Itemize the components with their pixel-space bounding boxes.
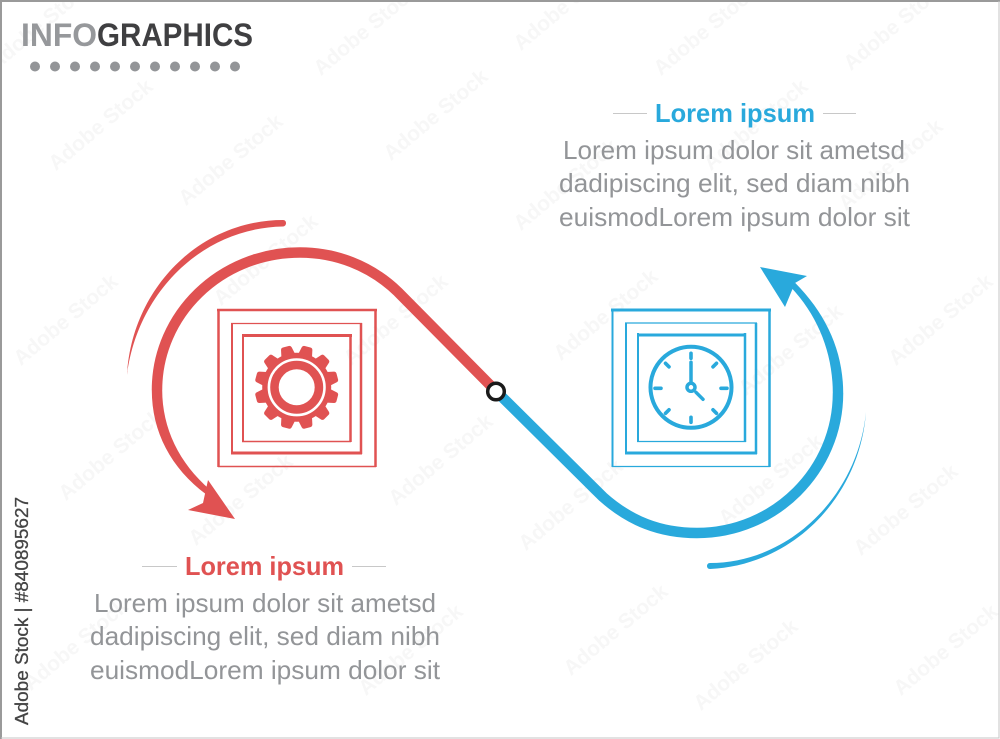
title <box>21 17 253 53</box>
blue body text: euismodLorem ipsum dolor sit <box>559 202 911 232</box>
infographic canvas: Adobe Stock <box>514 455 628 555</box>
infographic canvas: Adobe Stock <box>209 210 323 310</box>
infographic canvas: Adobe Stock <box>379 65 493 165</box>
infographic canvas: Adobe Stock <box>884 270 998 370</box>
infographic canvas: Adobe Stock <box>174 110 288 210</box>
infographic canvas: Adobe Stock <box>734 300 848 400</box>
infographic canvas: Adobe Stock <box>714 430 828 530</box>
title dots <box>30 62 240 72</box>
panel: blue text block <box>559 98 911 232</box>
panel: blue framed clock icon <box>611 309 771 467</box>
infographic canvas: Adobe Stock <box>889 600 1000 700</box>
blue body text <box>559 135 911 232</box>
red outer thin arc <box>127 220 286 375</box>
title: INFO <box>21 17 97 53</box>
infographic canvas: Adobe Stock <box>54 405 168 505</box>
red heading: Lorem ipsum <box>185 551 344 581</box>
infographic canvas: Adobe Stock <box>699 75 813 175</box>
red nested square frames <box>217 309 377 467</box>
infographic canvas: Adobe Stock <box>384 410 498 510</box>
blue curved arrow <box>500 267 843 533</box>
infographic canvas: Adobe Stock <box>549 265 663 365</box>
blue heading rules <box>613 112 856 114</box>
blue nested square frames <box>611 309 771 467</box>
infographic canvas: Adobe Stock <box>354 600 468 700</box>
infographic canvas: Adobe Stock <box>834 115 948 215</box>
blue outer thin arc <box>707 412 866 569</box>
blue body text: Lorem ipsum dolor sit ametsd <box>563 135 905 165</box>
infographic canvas: Adobe Stock <box>9 270 123 370</box>
red body text <box>90 588 441 685</box>
red body text: dadipiscing elit, sed diam nibh <box>90 621 440 651</box>
infographic canvas: Adobe Stock <box>509 135 623 235</box>
infographic canvas: Adobe Stock <box>339 270 453 370</box>
infographic canvas: Adobe Stock <box>849 460 963 560</box>
red curved arrow <box>152 252 492 519</box>
red body text: Lorem ipsum dolor sit ametsd <box>94 588 436 618</box>
stock credit: Adobe Stock | #840895627 <box>12 497 32 725</box>
title: GRAPHICS <box>97 17 253 53</box>
infographic canvas: Adobe Stock <box>19 595 133 695</box>
red heading rules <box>142 566 386 568</box>
icon: clock <box>650 347 732 428</box>
blue heading: Lorem ipsum <box>655 98 815 128</box>
infographic canvas: Adobe Stock <box>689 615 803 715</box>
icon: gear <box>254 345 339 430</box>
red body text: euismodLorem ipsum dolor sit <box>90 655 441 685</box>
center node <box>488 383 504 400</box>
infographic canvas: Adobe Stock <box>559 580 673 680</box>
panel: red framed gear icon <box>217 309 377 467</box>
infographic canvas: Adobe Stock <box>44 75 158 175</box>
blue body text: dadipiscing elit, sed diam nibh <box>559 168 910 198</box>
panel: red text block <box>90 551 441 685</box>
infographic canvas: Adobe Stock <box>184 450 298 550</box>
